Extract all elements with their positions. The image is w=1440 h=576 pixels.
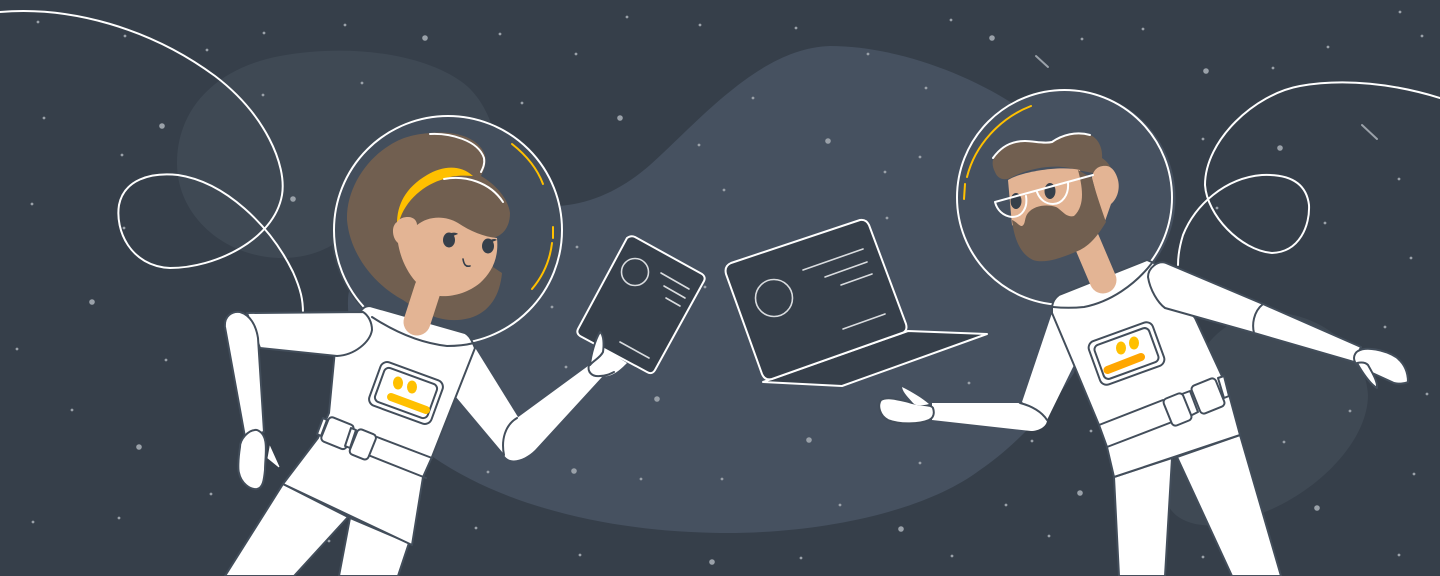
- tablet avatar: [622, 258, 648, 286]
- arm: man right forearm: [1253, 304, 1361, 362]
- blob: lower right nebula: [1166, 312, 1368, 526]
- astronaut: woman: [225, 116, 602, 576]
- belt: man: [1099, 376, 1229, 447]
- forearm: woman's raised arm: [502, 366, 602, 460]
- helmet: man glass: [957, 90, 1172, 305]
- laptop: [726, 220, 987, 386]
- leg: woman right: [339, 518, 409, 576]
- collar: man neckline: [1053, 263, 1152, 308]
- beard: man: [1012, 170, 1106, 261]
- face: man: [1008, 168, 1086, 240]
- helmet shadow: woman: [331, 116, 559, 344]
- torso: woman suit: [283, 306, 475, 545]
- hand: man right: [1354, 349, 1408, 388]
- face: woman: [393, 217, 497, 296]
- blob: large central nebula: [348, 46, 1087, 533]
- tether: man's looping cord: [1178, 82, 1440, 265]
- helmet reflections: man: [964, 106, 1031, 199]
- leg: woman left: [225, 484, 348, 576]
- belt: woman: [317, 416, 432, 478]
- hand: man open left: [879, 387, 934, 423]
- tether: woman's looping cord: [0, 11, 303, 313]
- glasses: man: [995, 175, 1093, 217]
- laptop text lines: [803, 249, 885, 329]
- badge: woman chest: [367, 360, 445, 426]
- elbow joint: man: [1020, 403, 1047, 420]
- tablet: [577, 236, 705, 373]
- laptop screen: [726, 220, 906, 379]
- laptop base: [763, 331, 987, 386]
- arm: woman left forearm: [225, 312, 264, 437]
- helmet: woman glass: [334, 116, 562, 344]
- hair: woman back: [347, 132, 510, 320]
- collar: woman neckline: [372, 317, 474, 346]
- ear and cheek: man: [1092, 166, 1119, 224]
- leg: man left: [1114, 458, 1172, 576]
- eyes: man: [1010, 183, 1056, 209]
- tablet text lines: [620, 273, 689, 358]
- badge: man chest: [1087, 320, 1166, 387]
- neck: man: [1086, 240, 1103, 280]
- torso: man suit: [1052, 260, 1240, 477]
- arm: woman left upper: [247, 312, 372, 356]
- eyes: woman: [443, 232, 497, 254]
- hair highlights: woman: [430, 134, 503, 202]
- helmet shadow: man: [960, 90, 1176, 306]
- astronaut: man: [879, 90, 1408, 576]
- shooting star dashes: [1036, 56, 1377, 139]
- tablet body: [577, 236, 705, 373]
- smile: woman: [463, 259, 470, 266]
- headband: woman: [397, 168, 473, 224]
- neck: woman: [417, 288, 428, 322]
- hair: man: [993, 133, 1112, 179]
- arm: man right upper: [1148, 262, 1263, 333]
- laptop avatar: [756, 280, 792, 316]
- hand: woman left: [238, 430, 279, 489]
- helmet reflections: woman: [512, 144, 553, 289]
- elbow joint: woman: [503, 418, 517, 455]
- hand: woman gripping tablet: [589, 332, 627, 377]
- blob: upper left nebula: [177, 51, 501, 258]
- back arm: woman's upper arm: [456, 346, 518, 453]
- back arm: man's upper arm: [1022, 313, 1074, 420]
- hair highlight: man: [993, 133, 1090, 158]
- forearm: man's open arm: [932, 403, 1047, 431]
- leg: man right: [1177, 435, 1281, 576]
